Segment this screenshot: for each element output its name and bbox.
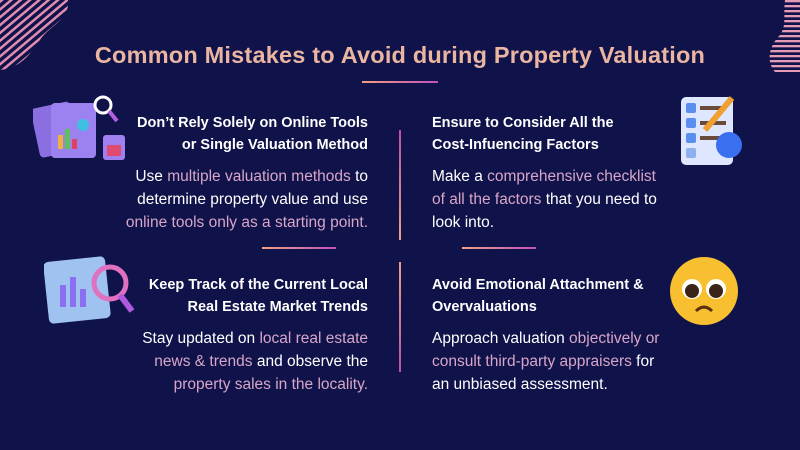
decor: top-left stripes blob — [0, 0, 68, 70]
horizontal divider right — [462, 247, 536, 249]
horizontal divider left — [262, 247, 336, 249]
body text: Make a comprehensive checklist — [432, 168, 656, 185]
body text — [432, 168, 657, 231]
vertical divider bottom — [399, 262, 401, 372]
icon: checklist — [681, 96, 742, 165]
body text — [126, 168, 368, 231]
heading — [432, 115, 614, 153]
heading: Don’t Rely Solely on Online Tools — [137, 115, 368, 131]
panel: emotional attachment — [432, 257, 738, 393]
heading: Ensure to Consider All the — [432, 115, 614, 131]
decor: top-right stripes blob — [770, 0, 800, 72]
heading: Cost-Infuencing Factors — [432, 137, 599, 153]
body text: an unbiased assessment. — [432, 376, 608, 393]
heading: Overvaluations — [432, 299, 537, 315]
heading: Keep Track of the Current Local — [149, 277, 368, 293]
body text: online tools only as a starting point. — [126, 214, 368, 231]
body text: property sales in the locality. — [174, 376, 368, 393]
body text: consult third-party appraisers for — [432, 353, 654, 370]
heading: or Single Valuation Method — [182, 137, 368, 153]
body text: look into. — [432, 214, 494, 231]
heading — [137, 115, 368, 153]
body text: news & trends and observe the — [154, 353, 368, 370]
icon: documents chart — [33, 96, 125, 160]
heading: Avoid Emotional Attachment & — [432, 277, 644, 293]
body text: Use multiple valuation methods to — [135, 168, 368, 185]
body text — [142, 330, 368, 393]
icon: pleading emoji — [670, 257, 738, 325]
heading — [149, 277, 368, 315]
panel: cost factors — [432, 96, 742, 231]
body text: Stay updated on local real estate — [142, 330, 368, 347]
title underline — [362, 81, 438, 83]
body text: of all the factors that you need to — [432, 191, 657, 208]
body text: determine property value and use — [137, 191, 368, 208]
body text — [432, 330, 660, 393]
title: Common Mistakes to Avoid during Property Valuation — [95, 42, 705, 68]
vertical divider top — [399, 130, 401, 240]
body text: Approach valuation objectively or — [432, 330, 659, 347]
panel: market trends — [44, 256, 368, 393]
heading — [432, 277, 644, 315]
heading: Real Estate Market Trends — [187, 299, 368, 315]
icon: trends chart — [44, 256, 134, 324]
panel: online tools — [33, 96, 368, 231]
